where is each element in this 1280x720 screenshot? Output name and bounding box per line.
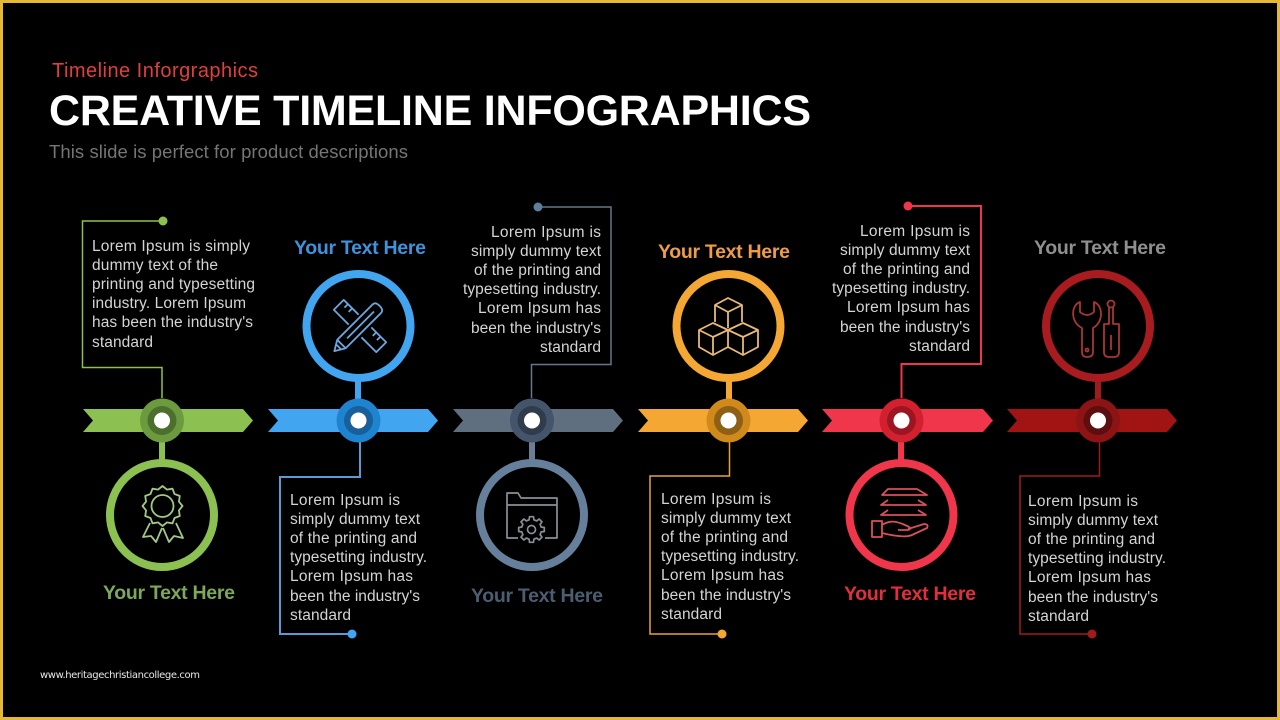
body text: Lorem Ipsum is: [290, 492, 400, 509]
body text: industry. Lorem Ipsum: [92, 295, 246, 312]
body text: of the printing and: [843, 261, 970, 278]
leader dot: [718, 630, 726, 638]
body text: been the industry's: [661, 587, 791, 604]
heading: Your Text Here: [103, 582, 235, 604]
text box leader: [82, 221, 163, 398]
arrow bar: [822, 409, 993, 432]
node: [880, 398, 924, 442]
body text: Lorem Ipsum is: [1028, 493, 1138, 510]
icon: ruler and pencil: [330, 300, 386, 355]
stem: [159, 440, 165, 464]
body text: simply dummy text: [661, 510, 792, 527]
kicker: Timeline Inforgraphics: [52, 60, 258, 82]
text box leader: [650, 440, 730, 634]
body text: [1028, 493, 1166, 625]
node: [510, 398, 554, 442]
body text: Lorem Ipsum has: [290, 568, 413, 585]
body text: been the industry's: [840, 319, 970, 336]
step 6: dark red: [1007, 237, 1177, 638]
ring: [110, 463, 214, 567]
ring: [480, 463, 584, 567]
body text: [290, 492, 427, 624]
text box leader: [902, 206, 981, 398]
arrow bar: [453, 409, 623, 432]
watermark url: www.heritagechristiancollege.com: [40, 670, 200, 681]
stem: [529, 440, 535, 464]
body text: been the industry's: [471, 320, 601, 337]
body text: printing and typesetting: [92, 276, 255, 293]
icon: wrench and screwdriver: [1073, 300, 1119, 357]
body text: [92, 238, 255, 351]
leader dot: [1088, 630, 1096, 638]
body text: simply dummy text: [290, 511, 421, 528]
text box leader: [1020, 440, 1100, 634]
step 3: slate: [453, 202, 623, 607]
body text: of the printing and: [1028, 531, 1155, 548]
text box leader: [532, 207, 611, 398]
heading: Your Text Here: [658, 241, 790, 263]
arrow bar: [83, 409, 253, 432]
body text: standard: [661, 606, 722, 623]
body text: Lorem Ipsum is: [491, 224, 601, 241]
stem: [355, 378, 361, 400]
ring: [1046, 274, 1150, 378]
arrow bar: [638, 409, 808, 432]
node: [706, 398, 750, 442]
body text: of the printing and: [661, 529, 788, 546]
stem: [726, 378, 732, 400]
body text: standard: [540, 339, 601, 356]
step 4: orange: [638, 241, 808, 638]
body text: typesetting industry.: [832, 280, 970, 297]
heading: Your Text Here: [471, 585, 603, 607]
body text: typesetting industry.: [661, 548, 799, 565]
node: [140, 398, 184, 442]
node: [1076, 398, 1120, 442]
body text: been the industry's: [1028, 589, 1158, 606]
body text: simply dummy text: [840, 242, 971, 259]
step 2: blue: [268, 237, 438, 638]
body text: [661, 491, 799, 623]
body text: Lorem Ipsum is: [860, 223, 970, 240]
text box leader: [280, 440, 360, 634]
body text: Lorem Ipsum has: [1028, 569, 1151, 586]
icon: award rosette: [142, 486, 183, 542]
body text: of the printing and: [474, 262, 601, 279]
arrow bar: [1007, 409, 1177, 432]
step 1: green: [82, 216, 255, 604]
body text: typesetting industry.: [1028, 550, 1166, 567]
body text: standard: [909, 338, 970, 355]
body text: simply dummy text: [471, 243, 602, 260]
arrow bar: [268, 409, 438, 432]
icon: stacked cubes: [699, 298, 758, 355]
body text: been the industry's: [290, 588, 420, 605]
icon: hand holding stack: [872, 489, 928, 537]
body text: [463, 224, 602, 356]
body text: standard: [1028, 608, 1089, 625]
body text: Lorem Ipsum has: [661, 567, 784, 584]
body text: [832, 223, 971, 355]
title: CREATIVE TIMELINE INFOGRAPHICS: [49, 87, 811, 135]
leader dot: [534, 202, 542, 212]
body text: Lorem Ipsum has: [847, 299, 970, 316]
body text: simply dummy text: [1028, 512, 1159, 529]
stem: [898, 440, 904, 464]
body text: dummy text of the: [92, 257, 218, 274]
step 5: red: [822, 202, 993, 605]
leader dot: [158, 216, 168, 226]
subtitle: This slide is perfect for product descriptions: [49, 141, 408, 162]
body text: has been the industry's: [92, 314, 253, 331]
body text: Lorem Ipsum has: [478, 300, 601, 317]
heading: Your Text Here: [1034, 237, 1166, 259]
body text: standard: [290, 607, 351, 624]
ring: [676, 274, 780, 378]
ring: [850, 463, 954, 567]
body text: Lorem Ipsum is: [661, 491, 771, 508]
body text: standard: [92, 334, 153, 351]
body text: of the printing and: [290, 530, 417, 547]
heading: Your Text Here: [294, 237, 426, 259]
icon: folder with gear: [507, 493, 557, 542]
ring: [306, 274, 410, 378]
body text: typesetting industry.: [290, 549, 427, 566]
body text: Lorem Ipsum is simply: [92, 238, 250, 255]
body text: typesetting industry.: [463, 281, 601, 298]
leader dot: [348, 630, 356, 638]
leader dot: [904, 202, 912, 210]
stem: [1095, 378, 1101, 400]
node: [336, 398, 380, 442]
heading: Your Text Here: [844, 583, 976, 605]
